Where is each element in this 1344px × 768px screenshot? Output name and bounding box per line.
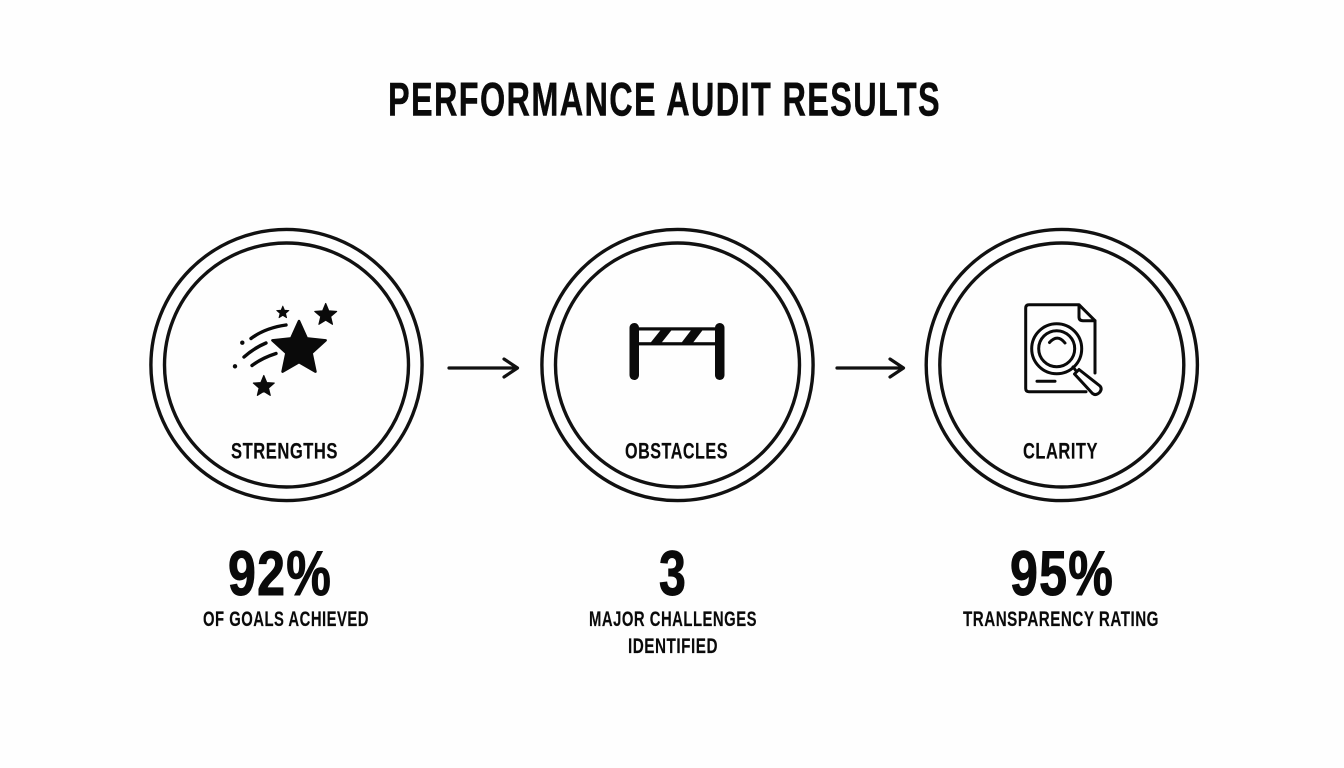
stat value 95%: 95%: [1010, 539, 1114, 609]
stat caption second line: IDENTIFIED: [628, 635, 718, 658]
obstacles label: OBSTACLES: [625, 438, 728, 464]
stat caption: OF GOALS ACHIEVED: [203, 608, 369, 631]
clarity double ring: [926, 229, 1197, 501]
strengths label: STRENGTHS: [231, 438, 338, 464]
title: PERFORMANCE AUDIT RESULTS: [388, 72, 941, 126]
strengths double ring: [151, 229, 422, 501]
arrow: strengths to obstacles: [449, 359, 518, 377]
stat value 92%: 92%: [228, 539, 332, 609]
clarity label: CLARITY: [1023, 438, 1098, 464]
icon: document with magnifier: [1026, 305, 1101, 395]
stat value 3: 3: [659, 539, 687, 609]
icon: shooting stars: [233, 304, 337, 395]
obstacles double ring: [542, 229, 813, 501]
panel: strengths: [151, 229, 422, 501]
arrow: obstacles to clarity: [837, 359, 904, 377]
stat caption: TRANSPARENCY RATING: [963, 608, 1159, 631]
stat: strengths: [203, 539, 369, 631]
icon: barrier: [630, 323, 724, 380]
panel: obstacles: [542, 229, 813, 501]
stat: clarity: [963, 539, 1159, 631]
stat: obstacles: [589, 539, 757, 658]
panel: clarity: [926, 229, 1197, 501]
stat caption: MAJOR CHALLENGES: [589, 608, 757, 631]
